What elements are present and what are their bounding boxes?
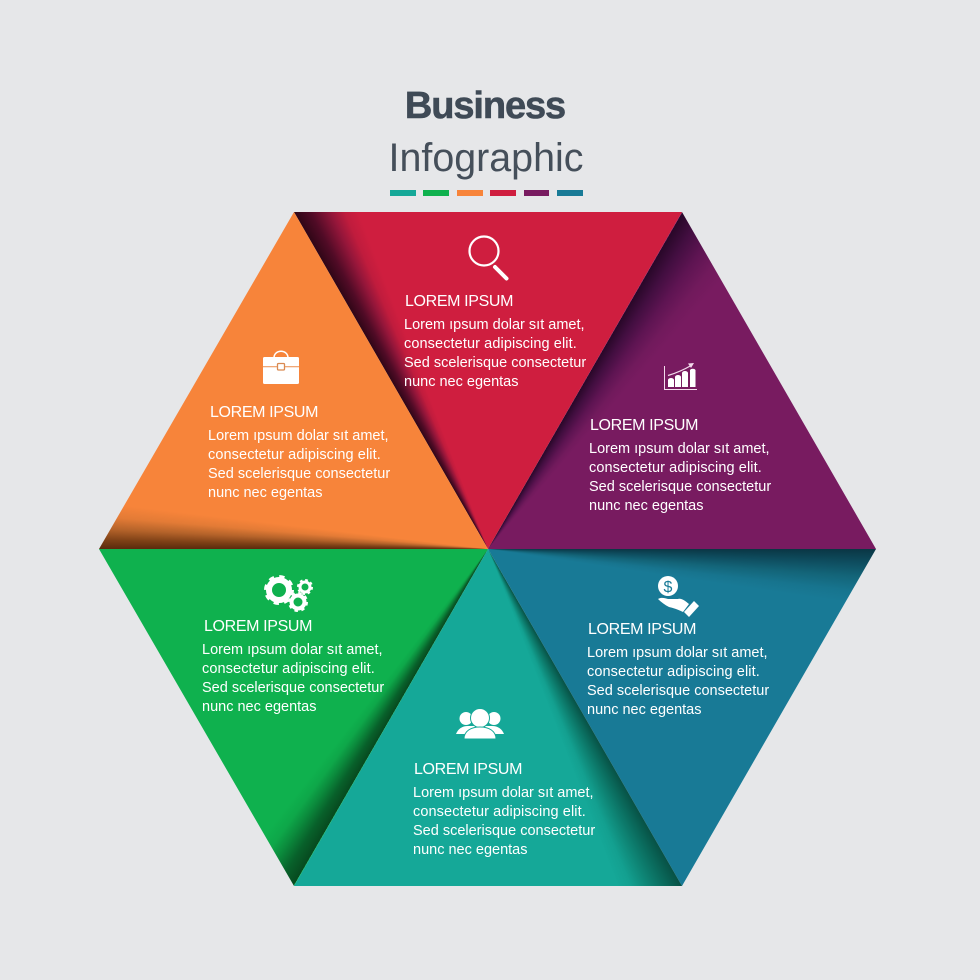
green triangle shape <box>99 549 488 886</box>
heading: LOREM IPSUM <box>414 760 522 778</box>
body text <box>404 316 586 390</box>
heading: LOREM IPSUM <box>590 416 698 434</box>
orange triangle shape <box>99 212 488 549</box>
body text <box>589 440 771 514</box>
title block <box>389 85 583 196</box>
red triangle shape <box>294 212 682 549</box>
subtitle: Infographic: Infographic <box>389 136 583 180</box>
body text: Lorem ıpsum dolar sıt amet, <box>589 440 770 456</box>
panel: blue triangle <box>488 549 876 886</box>
body text: consectetur adipiscing elit. <box>589 460 762 476</box>
body text: nunc nec egentas <box>208 484 322 500</box>
icon: hand holding coin <box>658 576 699 617</box>
icon: hand holding coin: $ <box>664 579 673 596</box>
body text <box>587 644 769 718</box>
panel: red triangle <box>294 212 682 549</box>
body text: nunc nec egentas <box>587 702 701 718</box>
body text: consectetur adipiscing elit. <box>404 336 577 352</box>
panel: teal triangle <box>294 549 682 886</box>
body text: Lorem ıpsum dolar sıt amet, <box>413 784 594 800</box>
body text: Sed scelerisque consectetur <box>208 466 390 482</box>
body text: nunc nec egentas <box>413 842 527 858</box>
body text <box>202 642 384 714</box>
colour key bars <box>390 190 583 196</box>
body text: consectetur adipiscing elit. <box>208 446 381 462</box>
body text: consectetur adipiscing elit. <box>202 660 375 676</box>
body text: nunc nec egentas <box>404 374 518 390</box>
body text: consectetur adipiscing elit. <box>413 804 586 820</box>
teal triangle shape <box>294 549 682 886</box>
body text: nunc nec egentas <box>589 498 703 514</box>
body text: Lorem ıpsum dolar sıt amet, <box>202 642 383 658</box>
body text: Lorem ıpsum dolar sıt amet, <box>208 428 389 444</box>
icon: growth chart <box>664 363 697 390</box>
panel: purple triangle <box>488 212 876 549</box>
purple triangle shape <box>488 212 876 549</box>
body text <box>208 428 390 500</box>
icon: magnifier <box>468 235 509 281</box>
body text: Sed scelerisque consectetur <box>589 478 771 494</box>
panel: orange triangle <box>99 212 488 549</box>
body text: consectetur adipiscing elit. <box>587 664 760 680</box>
body text: Sed scelerisque consectetur <box>202 680 384 696</box>
body text: Sed scelerisque consectetur <box>404 354 586 370</box>
icon: gears <box>264 575 313 612</box>
body text: Sed scelerisque consectetur <box>587 682 769 698</box>
icon: group of people <box>456 709 504 738</box>
title: Business: Business <box>405 85 565 127</box>
body text: Lorem ıpsum dolar sıt amet, <box>587 644 768 660</box>
blue triangle shape <box>488 549 876 886</box>
heading: LOREM IPSUM <box>405 292 513 310</box>
heading: LOREM IPSUM <box>588 620 696 638</box>
body text: Sed scelerisque consectetur <box>413 822 595 838</box>
body text <box>413 784 595 858</box>
body text: Lorem ıpsum dolar sıt amet, <box>404 316 585 332</box>
icon: briefcase <box>263 350 299 384</box>
heading: LOREM IPSUM <box>210 404 318 420</box>
body text: nunc nec egentas <box>202 698 316 714</box>
heading: LOREM IPSUM <box>204 618 312 634</box>
panel: green triangle <box>99 549 488 886</box>
